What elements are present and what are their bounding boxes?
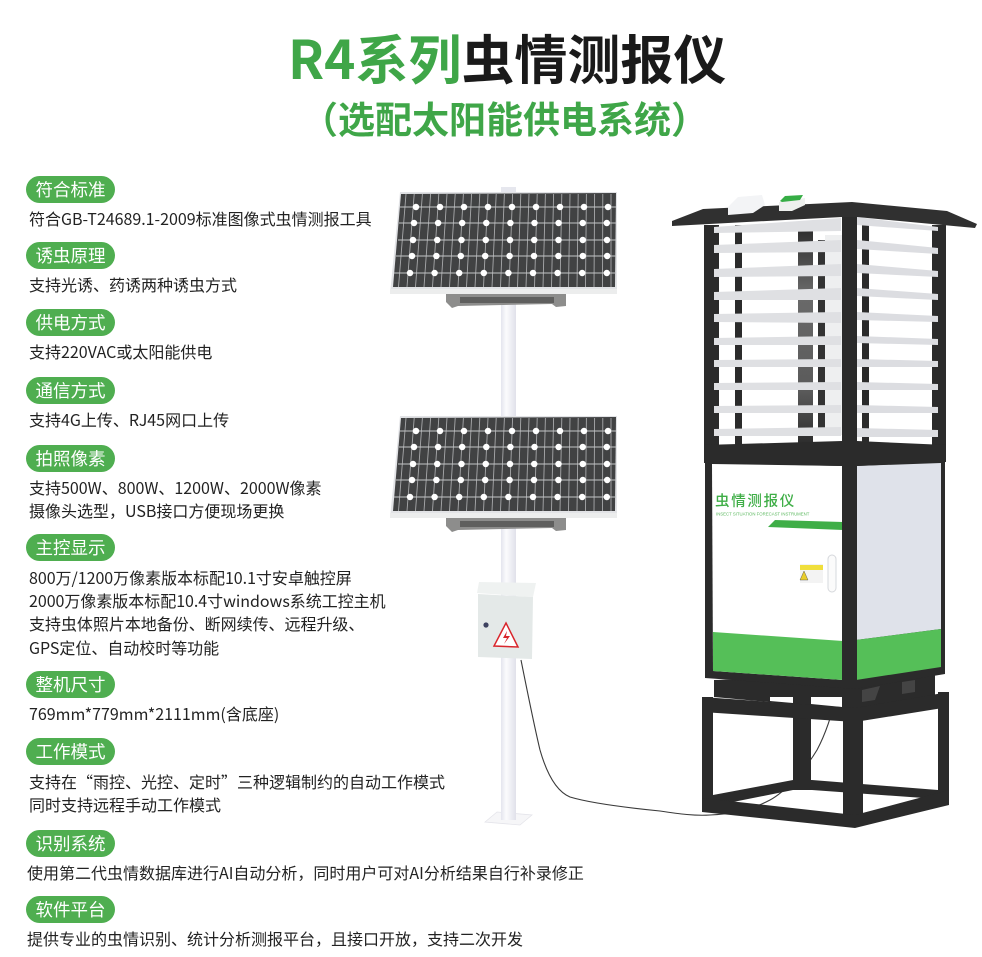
base stand [702, 675, 949, 828]
pill heading: 整机尺寸 [36, 672, 106, 696]
sensor: white box [728, 195, 765, 215]
spec: 工作模式 [26, 738, 445, 816]
title: R4系列虫情测报仪 [288, 19, 726, 95]
pill heading: 通信方式 [36, 378, 106, 402]
spec text: 提供专业的虫情识别、统计分析测报平台，且接口开放，支持二次开发 [27, 926, 523, 950]
panel: specifications [26, 176, 584, 950]
spec text: 支持在“雨控、光控、定时”三种逻辑制约的自动工作模式 [29, 768, 445, 792]
spec text: 摄像头选型，USB接口方便现场更换 [29, 498, 284, 522]
pill heading: 符合标准 [36, 176, 106, 202]
spec text: 支持光诱、药诱两种诱虫方式 [29, 272, 237, 296]
louvre slats: left face [714, 218, 841, 436]
pill heading: 诱虫原理 [36, 242, 106, 268]
spec: 拍照像素 [26, 445, 322, 522]
door handle [828, 555, 836, 592]
spec text: 支持220VAC或太阳能供电 [29, 338, 212, 362]
spec: 诱虫原理 [26, 242, 237, 296]
cable [521, 660, 837, 815]
spec text: 2000万像素版本标配10.4寸windows系统工控主机 [29, 588, 386, 612]
subtitle: （选配太阳能供电系统） [301, 90, 708, 144]
spec text: 800万/1200万像素版本标配10.1寸安卓触控屏 [29, 564, 352, 588]
louvre slats: right face [857, 217, 938, 437]
pill heading: 主控显示 [36, 534, 106, 560]
spec text: 同时支持远程手动工作模式 [29, 792, 221, 816]
spec text: GPS定位、自动校时等功能 [29, 635, 219, 659]
spec: 通信方式 [26, 377, 229, 430]
cabinet brand english: INSECT SITUATION FORECAST INSTRUMENT [716, 512, 810, 516]
solar panel: upper [390, 192, 617, 308]
spec: 整机尺寸 [26, 671, 279, 724]
spec text: 支持500W、800W、1200W、2000W像素 [29, 474, 322, 498]
louvre section [704, 217, 946, 687]
spec text: 支持虫体照片本地备份、断网续传、远程升级、 [29, 611, 364, 635]
spec: 软件平台 [26, 896, 523, 950]
spec text [29, 564, 386, 659]
pill heading: 工作模式 [36, 738, 106, 764]
spec text: 769mm*779mm*2111mm(含底座) [29, 700, 279, 724]
cabinet brand name: 虫情测报仪 [715, 490, 796, 511]
cabinet body [705, 450, 945, 689]
icon: high voltage warning [494, 623, 518, 647]
pole [485, 187, 532, 825]
pill heading: 供电方式 [36, 310, 106, 334]
spec: 识别系统 [26, 830, 584, 884]
spec: 供电方式 [26, 309, 212, 362]
roof [672, 202, 977, 228]
pill heading: 识别系统 [36, 830, 106, 856]
spec text [29, 474, 322, 522]
monitoring cabinet [672, 195, 977, 828]
spec text: 支持4G上传、RJ45网口上传 [29, 406, 229, 430]
spec text [29, 768, 445, 816]
spec text: 符合GB-T24689.1-2009标准图像式虫情测报工具 [29, 206, 372, 230]
pill heading: 软件平台 [36, 896, 106, 922]
electrical box [477, 582, 536, 659]
sensor: green-top box [779, 195, 805, 211]
pill heading: 拍照像素 [36, 446, 106, 470]
spec: 符合标准 [26, 176, 372, 230]
warning label [800, 564, 823, 583]
solar panel: lower [390, 416, 617, 532]
spec: 主控显示 [26, 534, 386, 659]
spec text: 使用第二代虫情数据库进行AI自动分析，同时用户可对AI分析结果自行补录修正 [27, 860, 584, 884]
